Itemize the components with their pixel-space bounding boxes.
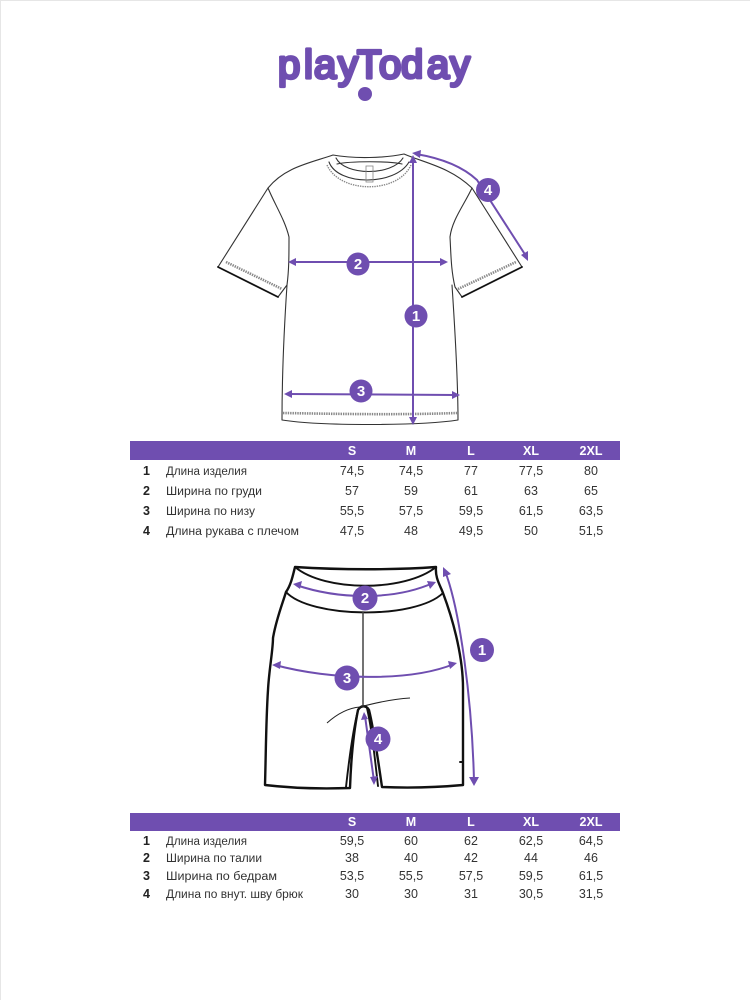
shorts measure 4: inseam: 4 [374, 731, 383, 748]
table 2 row 4 [143, 887, 603, 901]
table 1 row 1: 74,5 [340, 464, 364, 478]
table 2 row 2: Ширина по талии [166, 853, 262, 865]
table 1 row 1: 80 [584, 464, 598, 478]
table 1 header [130, 441, 620, 460]
table 1 row 4: 4 [143, 524, 150, 538]
table 1 row 3: 59,5 [459, 504, 483, 518]
shorts measure 4: inseam [361, 712, 390, 785]
table 1 row 3: 63,5 [579, 504, 603, 518]
table 1 header: M [406, 444, 416, 458]
t-shirt measure 2: chest: 2 [354, 256, 362, 273]
table 2 row 1: 1 [143, 834, 150, 848]
table 2 row 3: 59,5 [519, 869, 543, 883]
table 2 row 1: 59,5 [340, 834, 364, 848]
table 2 row 2: 40 [404, 851, 418, 865]
table 1 row 4 [143, 524, 603, 538]
table 2 row 2: 44 [524, 851, 538, 865]
table 1 row 2: 63 [524, 484, 538, 498]
table 1 row 2 [143, 484, 598, 498]
table 2 row 4: 30 [345, 887, 359, 901]
table 1 row 2: 2 [143, 484, 150, 498]
table 2 row 2: 38 [345, 851, 359, 865]
table 1 row 1: Длина изделия [166, 466, 247, 478]
table 1 row 2: 57 [345, 484, 359, 498]
table 1 row 2: Ширина по груди [166, 486, 262, 498]
t-shirt measure 3: hem [284, 380, 460, 402]
table 2 row 1 [143, 834, 603, 848]
shorts measure 1: length: 1 [478, 642, 486, 659]
table 1 row 1: 77,5 [519, 464, 543, 478]
table 1 row 3 [143, 504, 603, 518]
table 1 row 2: 61 [464, 484, 478, 498]
table 2 row 3: 3 [143, 869, 150, 883]
t-shirt measure 1: length [404, 155, 428, 425]
table 1 header: L [467, 444, 475, 458]
shorts drawing [265, 567, 463, 788]
table 2 row 2 [143, 851, 598, 865]
shorts measure 2: waist [293, 581, 436, 610]
table 1 row 1: 1 [143, 464, 150, 478]
table 1 row 2: 59 [404, 484, 418, 498]
table 1 row 1: 74,5 [399, 464, 423, 478]
t-shirt measure 4: sleeve [412, 150, 528, 261]
table 1 row 1: 77 [464, 464, 478, 478]
table 1 row 4: Длина рукава с плечом [166, 526, 299, 538]
table 2 header: XL [523, 815, 539, 829]
table 2 header: S [348, 815, 356, 829]
table 2 row 1: 62 [464, 834, 478, 848]
logo: playToday [278, 43, 470, 87]
shorts measure 3: hips: 3 [343, 670, 351, 687]
shorts measure 3: hips [272, 661, 457, 690]
table 1 row 3: 61,5 [519, 504, 543, 518]
table 2 row 3: 57,5 [459, 869, 483, 883]
table 2 header: L [467, 815, 475, 829]
t-shirt measure 1: length: 1 [412, 308, 420, 325]
t-shirt measure 3: hem: 3 [357, 383, 365, 400]
table 2 row 3: 53,5 [340, 869, 364, 883]
table 2 row 3: Ширина по бедрам [166, 871, 277, 883]
table 2 header: 2XL [580, 815, 603, 829]
table 2 row 1: 60 [404, 834, 418, 848]
table 1 row 4: 47,5 [340, 524, 364, 538]
table 2 row 4: Длина по внут. шву брюк [166, 889, 304, 901]
table 2 row 1: Длина изделия [166, 836, 247, 848]
t-shirt measure 4: sleeve: 4 [484, 182, 493, 199]
table 2 row 4: 30,5 [519, 887, 543, 901]
table 2 row 4: 30 [404, 887, 418, 901]
table 1 row 4: 48 [404, 524, 418, 538]
table 1 row 2: 65 [584, 484, 598, 498]
table 2 row 3 [143, 869, 603, 883]
table 1 row 4: 49,5 [459, 524, 483, 538]
table 2 row 4: 31,5 [579, 887, 603, 901]
table 1 row 3: Ширина по низу [166, 506, 255, 518]
table 1 row 3: 55,5 [340, 504, 364, 518]
table 1 row 3: 57,5 [399, 504, 423, 518]
table 1 header: S [348, 444, 356, 458]
table 2 header: M [406, 815, 416, 829]
table 2 row 4: 4 [143, 887, 150, 901]
table 2 row 1: 62,5 [519, 834, 543, 848]
table 2 row 2: 2 [143, 851, 150, 865]
table 1 row 3: 3 [143, 504, 150, 518]
table 2 row 2: 42 [464, 851, 478, 865]
t-shirt drawing [218, 154, 522, 424]
shorts measure 1: length [443, 567, 494, 786]
shorts measure 2: waist: 2 [361, 590, 369, 607]
t-shirt measure 2: chest [288, 252, 448, 276]
table 2 row 1: 64,5 [579, 834, 603, 848]
table 1 row 4: 50 [524, 524, 538, 538]
table 2 row 3: 55,5 [399, 869, 423, 883]
table 2 header [130, 813, 620, 831]
table 1 header: XL [523, 444, 539, 458]
table 1 header: 2XL [580, 444, 603, 458]
table 2 row 4: 31 [464, 887, 478, 901]
table 1 row 4: 51,5 [579, 524, 603, 538]
table 2 row 2: 46 [584, 851, 598, 865]
table 2 row 3: 61,5 [579, 869, 603, 883]
table 1 row 1 [143, 464, 598, 478]
